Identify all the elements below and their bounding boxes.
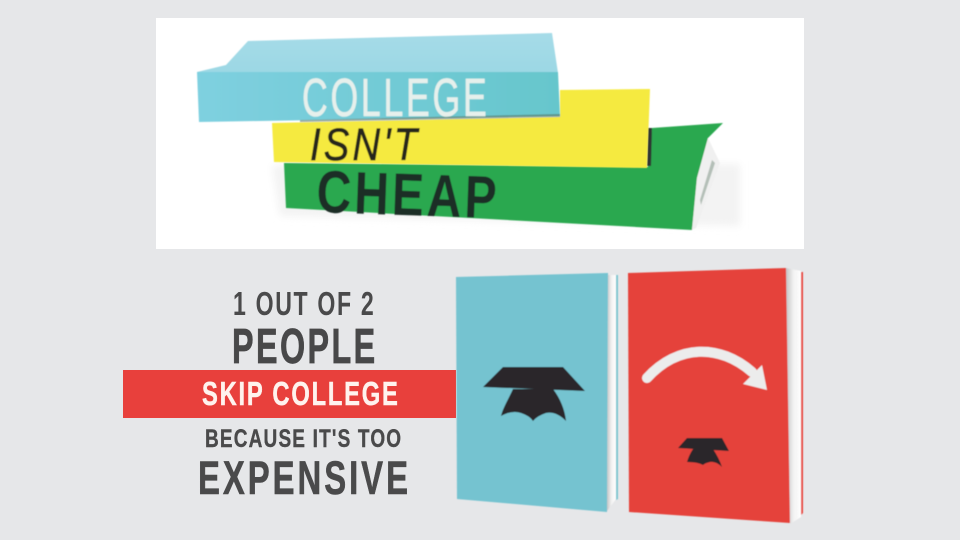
- icon: graduation cap large: [483, 367, 585, 421]
- text: 1 out of 2: 1 OUT OF 2: [233, 286, 374, 323]
- label: COLLEGE: COLLEGE: [302, 68, 487, 128]
- label: ISN'T: ISN'T: [310, 119, 419, 170]
- blue book: [197, 33, 560, 128]
- blue book with large cap: [456, 273, 618, 512]
- text: SKIP COLLEGE: SKIP COLLEGE: [202, 376, 398, 413]
- text: EXPENSIVE: EXPENSIVE: [198, 451, 408, 504]
- label: CHEAP: CHEAP: [316, 158, 498, 232]
- text: PEOPLE: PEOPLE: [232, 318, 375, 374]
- icon: curved arrow: [647, 352, 767, 390]
- text: because it's too: BECAUSE IT'S TOO: [205, 424, 401, 453]
- yellow book: [272, 89, 650, 170]
- red book with small cap and arrow: [628, 268, 803, 524]
- icon: graduation cap small: [678, 438, 729, 467]
- book shadow: [272, 164, 740, 226]
- red banner: [123, 370, 456, 418]
- panel: book stack: [156, 18, 804, 249]
- green book: [284, 123, 723, 232]
